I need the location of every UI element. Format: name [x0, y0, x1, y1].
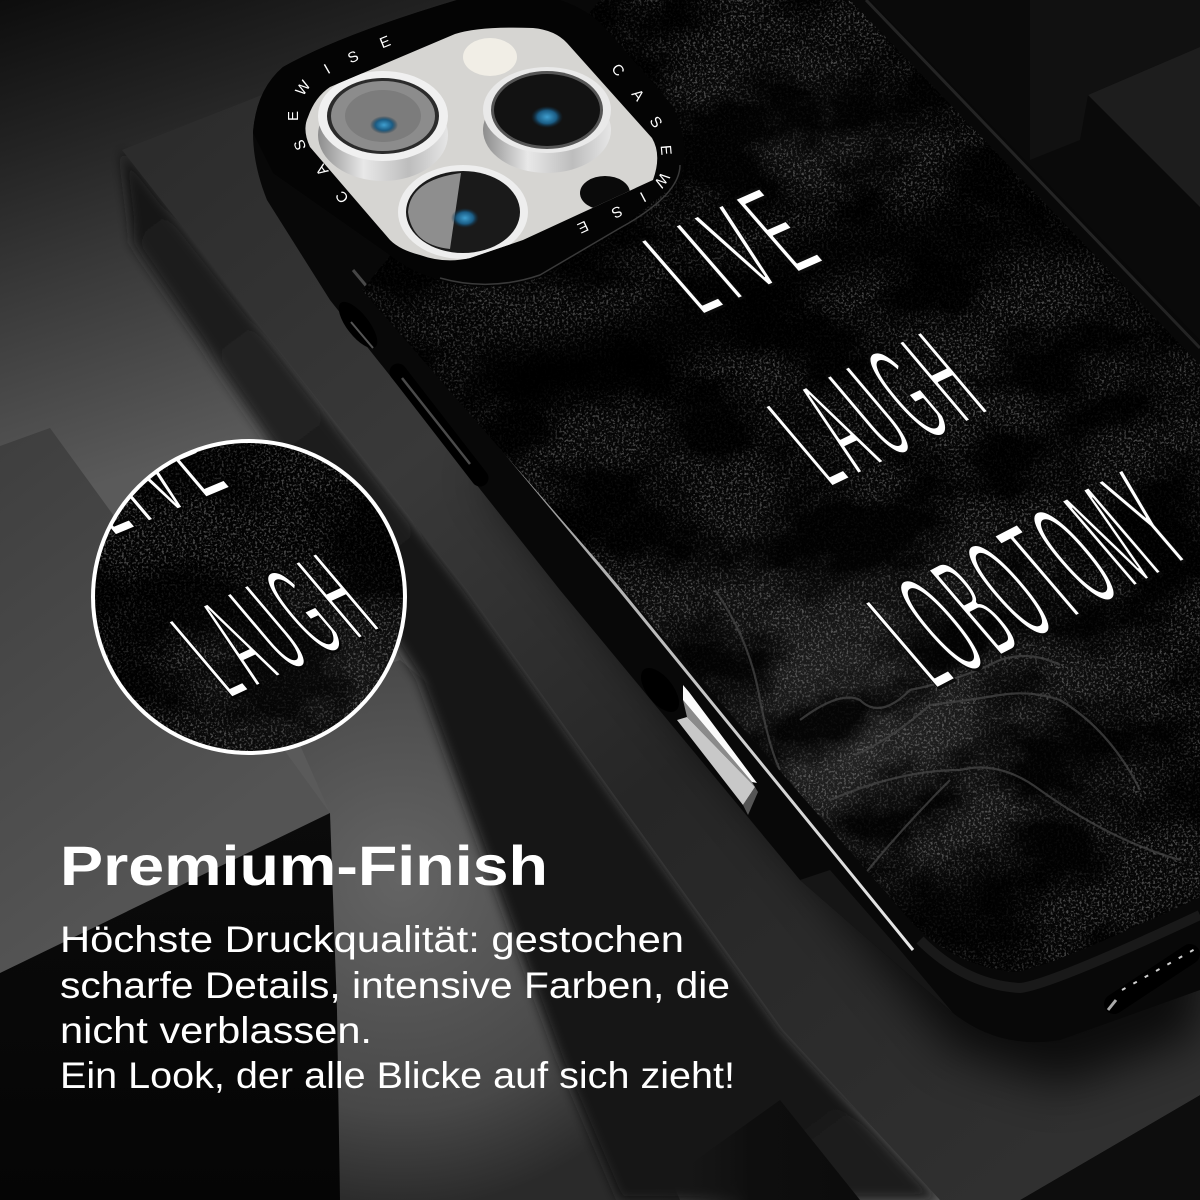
- mute switch: [332, 296, 384, 354]
- camera island: [253, 0, 684, 287]
- magnified LIVE: LIVE: [28, 383, 261, 561]
- phone screen with dark textured print: [350, 0, 1200, 1000]
- print text: LIVE LAUGH LOBOTOMY: LAUGH: [740, 301, 1020, 513]
- brand ring text CASEWISE: I: [637, 188, 649, 205]
- magnifier circle: [91, 439, 407, 755]
- microphone hole: [580, 176, 630, 210]
- body copy: [60, 919, 735, 1096]
- brand ring text CASEWISE: E: [285, 111, 302, 121]
- volume button: [398, 372, 480, 478]
- marble contour lines: [715, 590, 1180, 880]
- flash: [463, 38, 517, 76]
- body bezel around screen: [920, 915, 1200, 988]
- brand ring text CASEWISE: A: [628, 86, 647, 104]
- silver side button: [677, 685, 758, 815]
- brand ring text CASEWISE: S: [646, 113, 665, 131]
- brand ring text CASEWISE: C: [332, 187, 352, 206]
- brand ring text CASEWISE: A: [313, 161, 332, 179]
- body copy: Höchste Druckqualität: gestochen: [60, 919, 684, 960]
- body copy: scharfe Details, intensive Farben, die: [60, 965, 730, 1006]
- brand ring text CASEWISE: [285, 33, 674, 236]
- brand ring text CASEWISE: S: [291, 137, 310, 152]
- print text: LIVE LAUGH LOBOTOMY: [618, 161, 1200, 717]
- body copy: nicht verblassen.: [60, 1010, 372, 1051]
- brand ring text CASEWISE: W: [650, 169, 673, 191]
- brand ring text CASEWISE: W: [292, 77, 315, 99]
- brand ring text CASEWISE: C: [608, 61, 628, 80]
- heading: Premium-Finish: [60, 834, 548, 897]
- print text: LIVE LAUGH LOBOTOMY: LIVE: [618, 161, 855, 339]
- lens three: [398, 165, 528, 259]
- lens one: [318, 71, 448, 181]
- side buttons: [332, 296, 758, 815]
- camera window glass: [305, 28, 657, 260]
- phone edge highlight: [353, 270, 913, 950]
- brand ring text CASEWISE: S: [345, 48, 361, 67]
- body copy: Ein Look, der alle Blicke auf sich zieht!: [60, 1055, 735, 1096]
- usb-c port: [1108, 948, 1197, 1010]
- magnified LAUGH: LAUGH: [144, 524, 410, 723]
- brand ring text CASEWISE: E: [575, 217, 591, 236]
- brand ring text CASEWISE: S: [609, 202, 625, 221]
- brand ring text CASEWISE: I: [321, 61, 333, 78]
- lens two: [483, 67, 611, 173]
- brand ring text CASEWISE: E: [377, 33, 393, 52]
- brand ring text CASEWISE: E: [657, 144, 674, 156]
- phone case body: [253, 0, 1200, 1042]
